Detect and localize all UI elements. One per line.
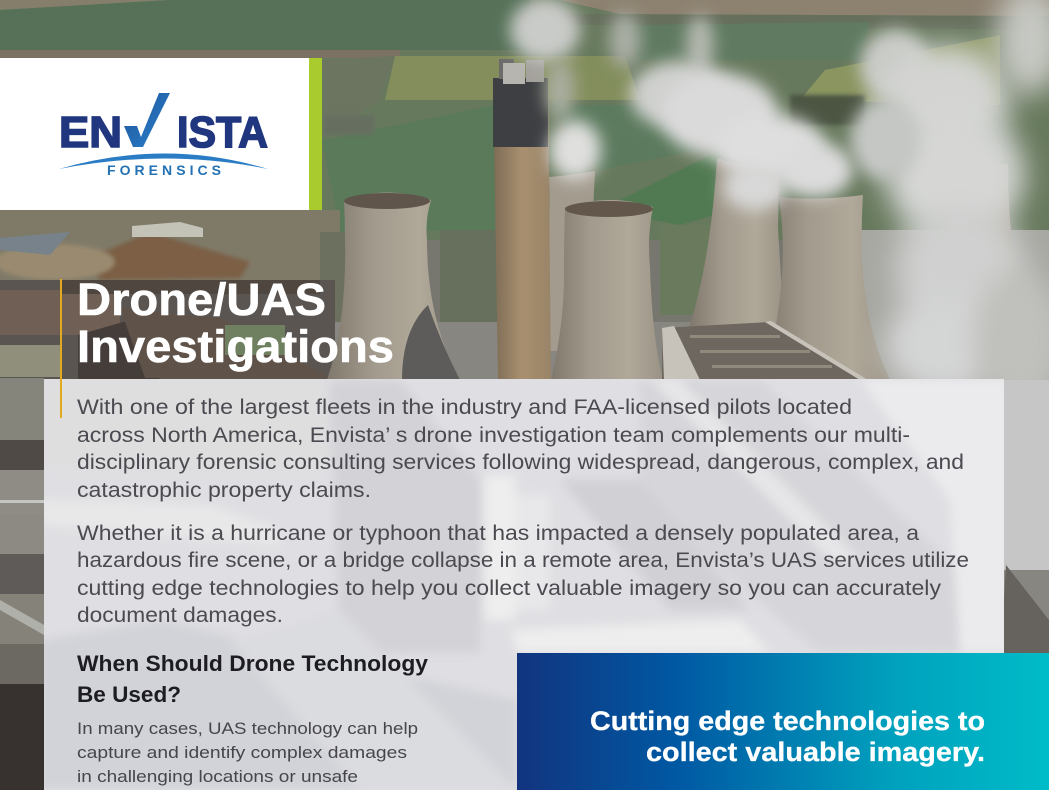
- intro paragraph: catastrophic property claims.: [77, 479, 371, 502]
- steam plumes: [510, 0, 1049, 570]
- logo: Envista Forensics: EN: [59, 108, 122, 157]
- title: Drone/UAS: [77, 274, 326, 325]
- near cooling towers: [327, 192, 890, 380]
- yellow accent rule: [60, 279, 62, 418]
- intro paragraph: disciplinary forensic consulting services following widespread, dangerous, complex, and: [77, 451, 964, 474]
- body text: capture and identify complex damages: [77, 743, 407, 762]
- title: Investigations: [77, 321, 394, 372]
- second paragraph: cutting edge technologies to help you collect valuable imagery so you can accurately: [77, 577, 942, 600]
- right plant ground: [335, 322, 1049, 790]
- chimney: [493, 59, 551, 380]
- turbine hall roof: [662, 321, 868, 380]
- second paragraph: Whether it is a hurricane or typhoon that has impacted a densely populated area, a: [77, 522, 919, 545]
- industrial ground, left: [0, 280, 335, 790]
- callout text: [590, 706, 985, 767]
- callout text: collect valuable imagery.: [646, 737, 985, 767]
- title: [77, 274, 394, 372]
- subheading: [77, 651, 429, 707]
- logo: Envista Forensics: FORENSICS: [107, 162, 221, 178]
- second paragraph: [77, 522, 969, 627]
- body text: In many cases, UAS technology can help: [77, 719, 418, 738]
- second paragraph: hazardous fire scene, or a bridge collapse in a remote area, Envista’s UAS services utilize: [77, 549, 969, 572]
- body text: [77, 719, 418, 786]
- intro paragraph: across North America, Envista’ s drone investigation team complements our multi-: [77, 424, 910, 447]
- logo card: [0, 58, 322, 210]
- second paragraph: document damages.: [77, 604, 283, 627]
- panel structure hints: [40, 379, 1010, 790]
- translucent text panel: [40, 379, 1010, 790]
- far cooling towers: [538, 158, 1032, 351]
- logo: Envista Forensics: ISTA: [177, 108, 268, 157]
- subheading: Be Used?: [77, 682, 181, 707]
- body text: in challenging locations or unsafe: [77, 767, 358, 786]
- intro paragraph: [77, 396, 964, 502]
- logo: Envista Forensics: [59, 93, 268, 178]
- callout text: Cutting edge technologies to: [590, 706, 985, 736]
- subheading: When Should Drone Technology: [77, 651, 429, 676]
- fields: [0, 0, 1049, 350]
- callout banner: [517, 653, 1049, 790]
- intro paragraph: With one of the largest fleets in the industry and FAA-licensed pilots located: [77, 396, 852, 419]
